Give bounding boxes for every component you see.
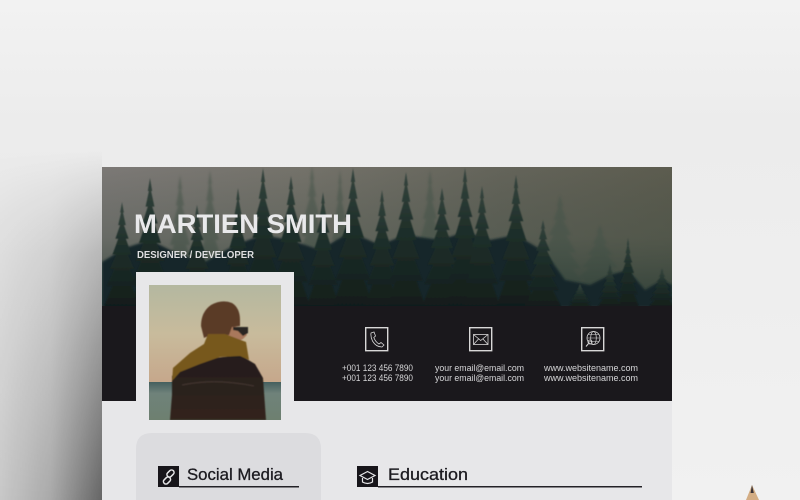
contact text: website: www.websitename.com bbox=[543, 373, 638, 383]
scarf bbox=[172, 334, 249, 381]
job title: DESIGNER / DEVELOPER bbox=[137, 249, 254, 261]
panel: education bbox=[357, 465, 642, 488]
name heading: MARTIEN SMITH bbox=[134, 209, 352, 239]
contact text: phone bbox=[342, 363, 413, 383]
panel: social media bbox=[136, 433, 321, 500]
jacket sheen bbox=[182, 382, 254, 386]
icon: link bbox=[158, 466, 179, 487]
contact text: email bbox=[435, 363, 524, 383]
photo frame bbox=[136, 272, 294, 432]
heading: social media: Social Media bbox=[187, 465, 284, 484]
icon: graduation cap bbox=[357, 466, 378, 487]
face bbox=[228, 326, 248, 340]
portrait photo bbox=[149, 285, 281, 420]
distant trees bbox=[170, 170, 604, 261]
icon: mail bbox=[470, 328, 492, 351]
icon: pencil tip bbox=[746, 485, 759, 500]
contact band bbox=[102, 306, 672, 401]
resume sheet bbox=[102, 167, 672, 500]
contact text: email: your email@email.com bbox=[435, 373, 524, 383]
contact text: phone: +001 123 456 7890 bbox=[342, 373, 413, 383]
icon: globe bbox=[582, 328, 604, 351]
foreground trees bbox=[104, 168, 676, 308]
contact text: website bbox=[543, 363, 638, 383]
paper shadow bbox=[0, 150, 102, 500]
sunglasses bbox=[233, 327, 248, 336]
banner: misty forest bbox=[102, 166, 676, 315]
icon: phone bbox=[366, 328, 388, 351]
lower forest mass bbox=[102, 232, 672, 307]
heading: education: Education bbox=[388, 465, 468, 484]
hair bbox=[201, 301, 240, 338]
contact text: website: www.websitename.com bbox=[543, 363, 638, 373]
contact text: email: your email@email.com bbox=[435, 363, 524, 373]
jacket bbox=[170, 355, 266, 420]
contact text: phone: +001 123 456 7890 bbox=[342, 363, 413, 373]
